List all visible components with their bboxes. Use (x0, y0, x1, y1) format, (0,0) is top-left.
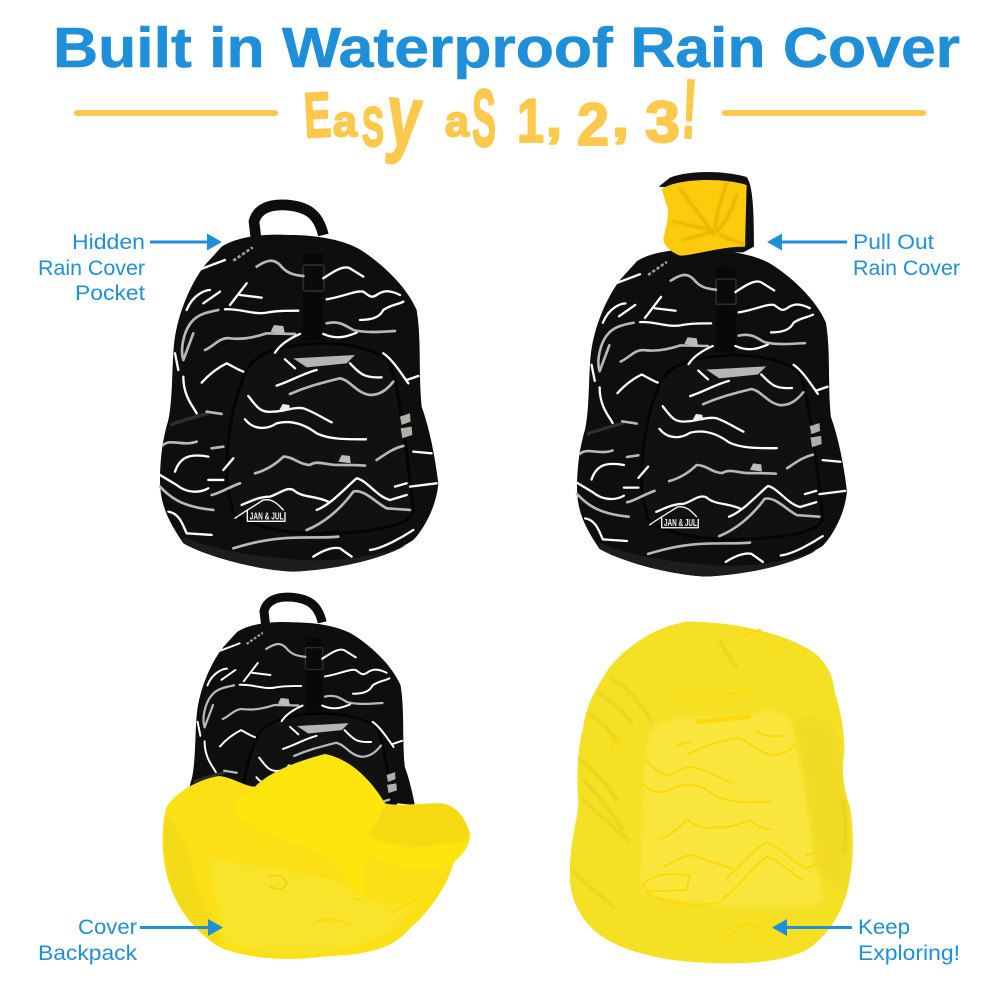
label: Hidden Rain Cover Pocket: Rain Cover (38, 257, 145, 280)
label: Hidden Rain Cover Pocket: Pocket (75, 282, 145, 305)
arrow: to hidden pocket (150, 234, 222, 250)
subtitle: Easy as 1, 2, 3!: 2 (577, 91, 609, 158)
arrow: to pulled out cover (767, 234, 847, 250)
subtitle: Easy as 1, 2, 3!: S (362, 95, 384, 158)
backpack: step 1 (160, 205, 438, 572)
label: Hidden Rain Cover Pocket: Hidden (72, 231, 145, 254)
subtitle: Easy as 1, 2, 3!: a (445, 97, 470, 146)
label: Cover Backpack (38, 916, 138, 965)
label: Pull Out Rain Cover: Rain Cover (853, 257, 960, 280)
label: Hidden Rain Cover Pocket (38, 231, 145, 305)
arrow: to covered backpack (772, 919, 852, 936)
subtitle: Easy as 1, 2, 3!: 3 (645, 90, 680, 155)
label: Pull Out Rain Cover (853, 231, 960, 280)
subtitle: Easy as 1, 2, 3!: 1 (517, 87, 544, 156)
label: Keep Exploring! (858, 916, 960, 965)
backpack: step 3 with rain cover partly on (163, 597, 470, 959)
subtitle: Easy as 1, 2, 3!: y (382, 65, 427, 167)
label: Pull Out Rain Cover: Pull Out (853, 231, 934, 254)
arrow: to partly covered backpack (140, 919, 223, 936)
subtitle: Easy as 1, 2, 3!: a (333, 97, 358, 146)
label: Keep Exploring!: Keep (858, 916, 910, 939)
label: Cover Backpack: Backpack (38, 942, 138, 965)
subtitle: Easy as 1, 2, 3!: , (546, 91, 562, 147)
label: Cover Backpack: Cover (78, 916, 137, 939)
subtitle: Easy as 1, 2, 3!: , (612, 91, 629, 147)
title: Built in Waterproof Rain Cover (53, 16, 960, 80)
subtitle: Easy as 1, 2, 3!: S (472, 73, 496, 164)
backpack: step 2 with rain cover pulled out (577, 172, 847, 577)
rain cover: step 4 fully covered backpack (570, 622, 853, 963)
subtitle: Easy as 1, 2, 3!: ! (680, 62, 700, 156)
subtitle: Easy as 1, 2, 3!: E (302, 78, 333, 152)
label: Keep Exploring!: Exploring! (858, 942, 960, 965)
subtitle: Easy as 1, 2, 3! (74, 62, 926, 167)
